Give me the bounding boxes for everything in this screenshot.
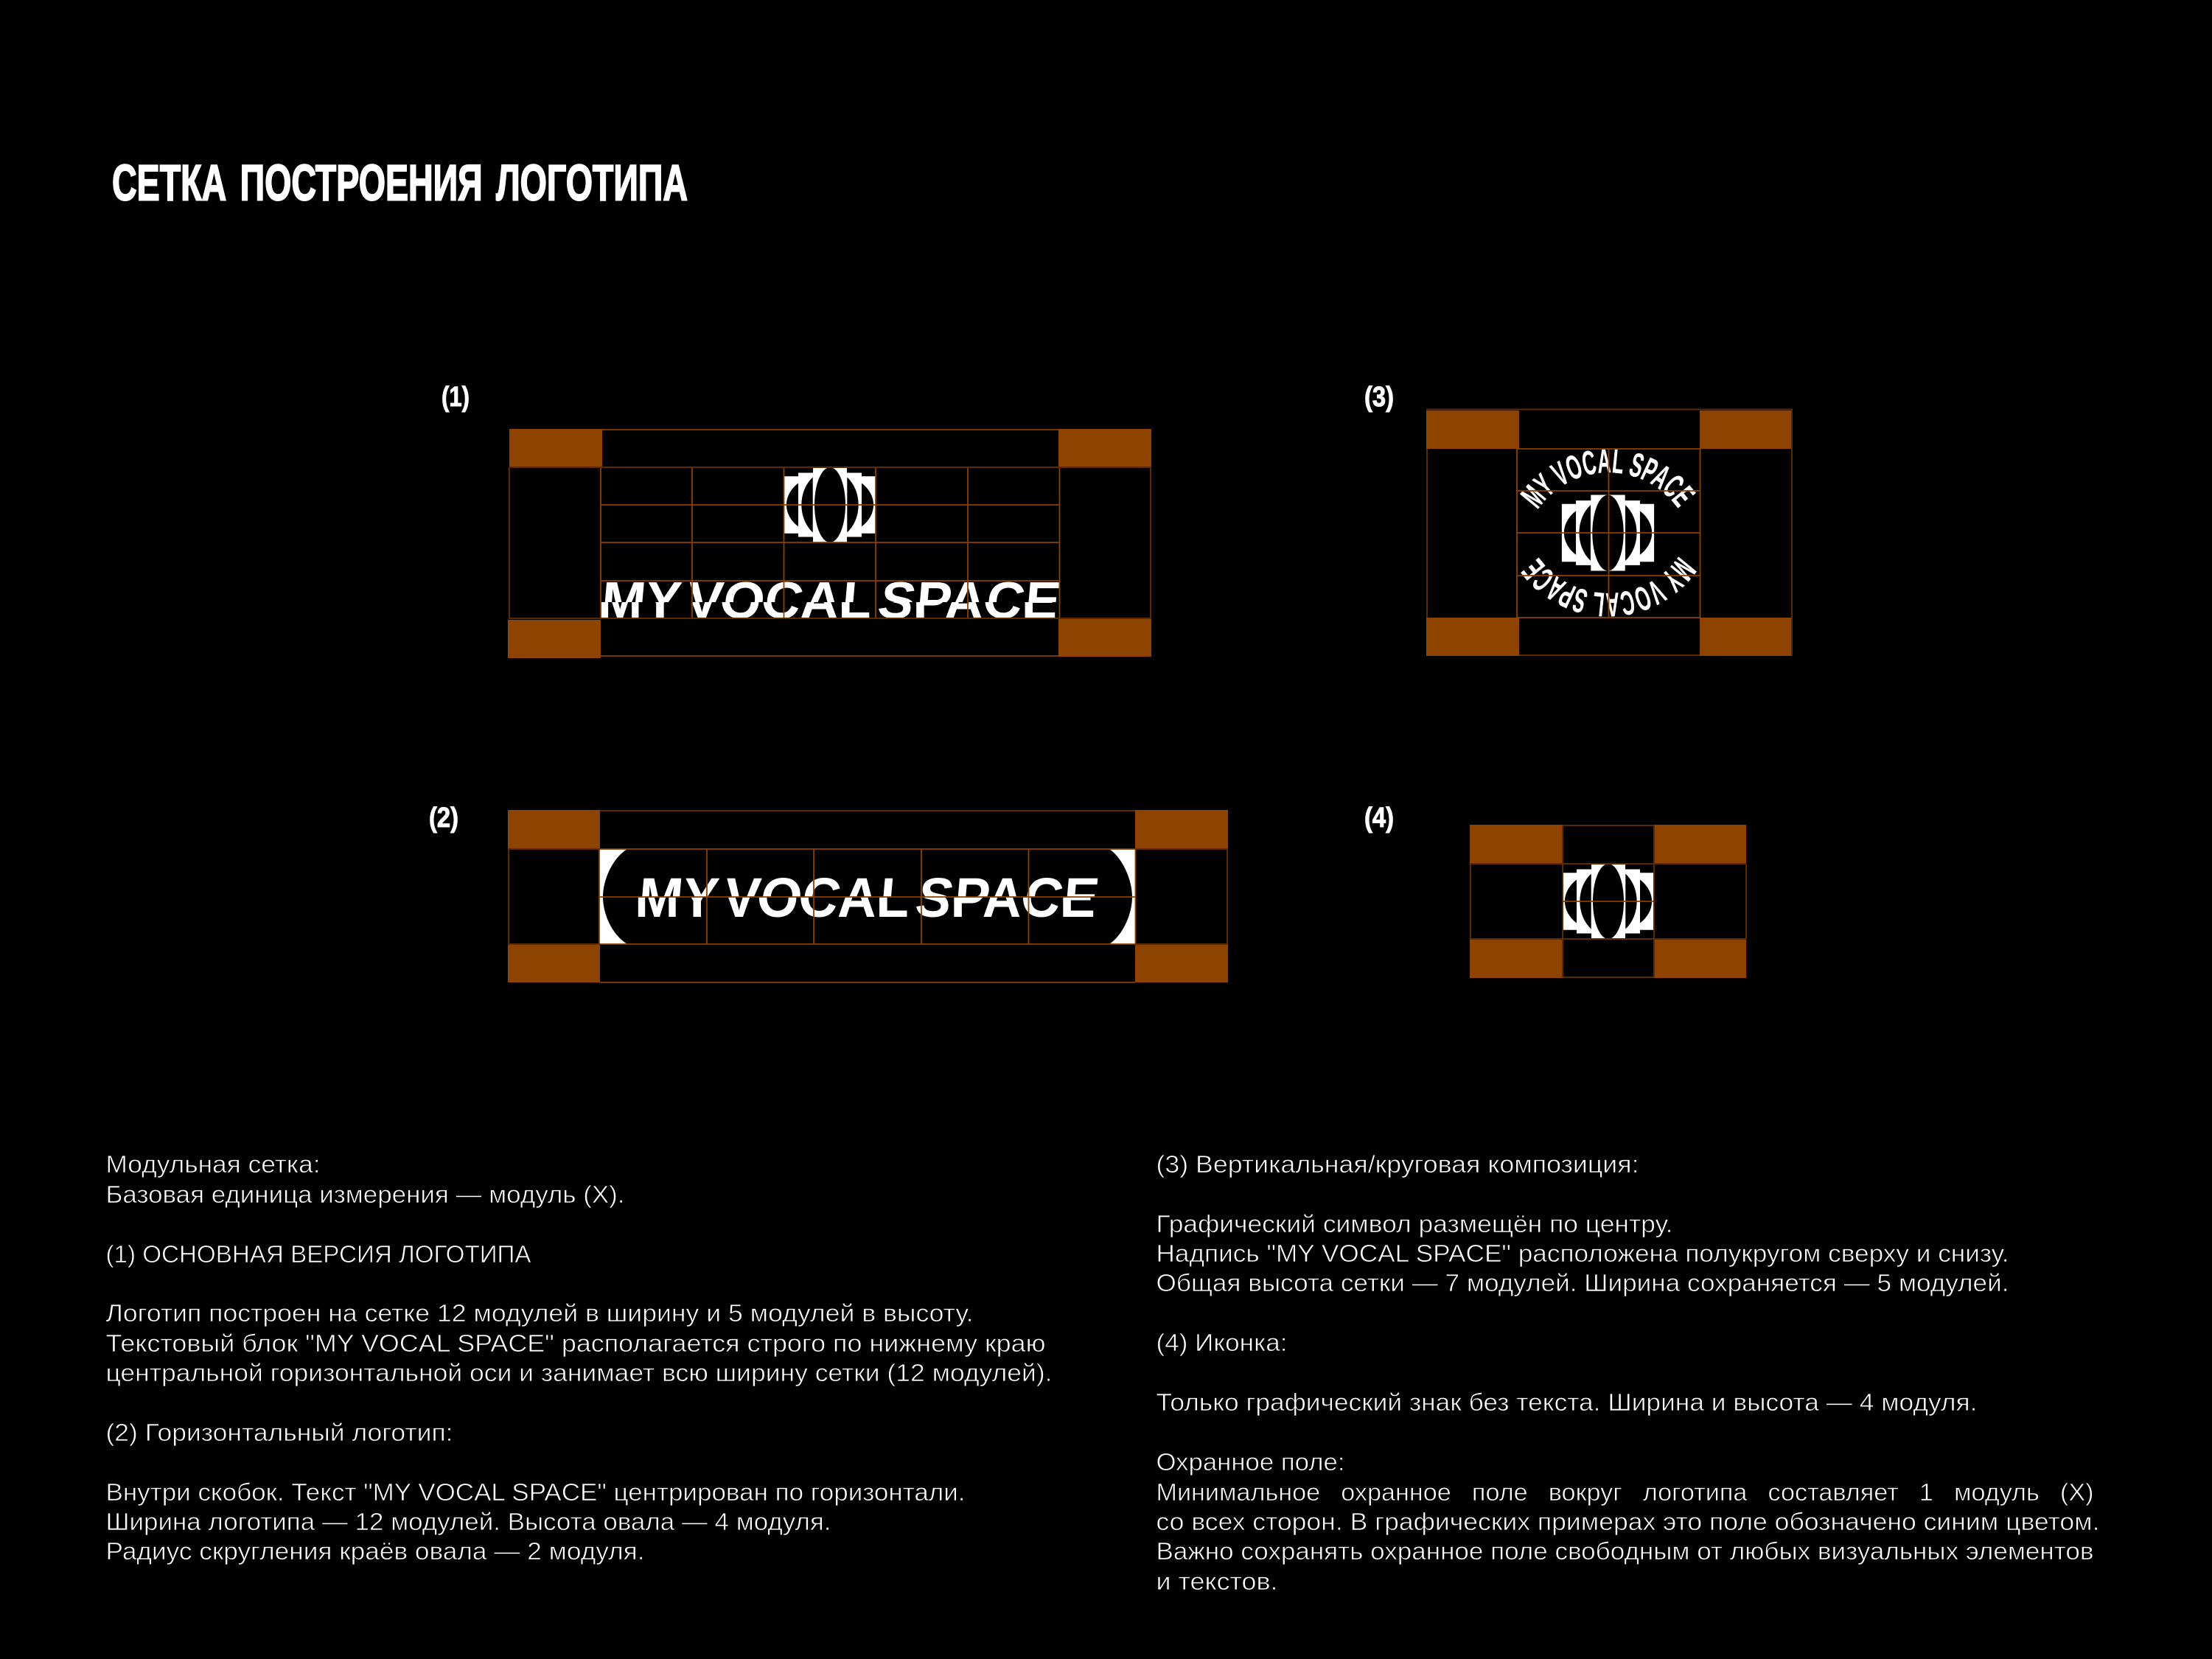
clear-space corner modules — [1470, 825, 1746, 978]
clear-space corner modules — [508, 429, 1151, 658]
panel: horizontal logo grid (2) — [508, 810, 1228, 982]
wordmark: MY VOCAL SPACE — [635, 867, 1095, 929]
text block: left column: Модульная сетка: — [106, 1150, 320, 1178]
text block: right column: Минимальное охранное поле вокруг логотипа составляет 1 модуль (X) — [1156, 1478, 2093, 1506]
logo symbol — [1562, 495, 1654, 571]
text block: right column: Важно сохранять охранное поле свободным от любых визуальных элементов — [1156, 1537, 2093, 1565]
label: (4): (4) — [1364, 803, 1394, 834]
text block: left column: Текстовый блок "MY VOCAL SPACE" располагается строго по нижнему краю — [106, 1330, 1045, 1357]
curved wordmark, top and bottom: MY VOCAL SPACE — [1520, 450, 1696, 509]
wordmark — [638, 878, 1098, 917]
panel: circular logo grid (3) — [1426, 408, 1793, 656]
text block: left column: Логотип построен на сетке 12 модулей в ширину и 5 модулей в высоту. — [106, 1299, 973, 1327]
panel: icon grid (4) — [1470, 825, 1746, 978]
panel: main logo grid (1) — [508, 429, 1151, 658]
text block: left column: Радиус скругления краёв овала — 2 модуля. — [106, 1537, 644, 1565]
label: (2): (2) — [429, 803, 458, 834]
text block: left column: Ширина логотипа — 12 модулей. Высота овала — 4 модуля. — [106, 1508, 831, 1535]
wordmark: MY VOCAL SPACE — [599, 572, 1063, 630]
text block: right column: и текстов. — [1156, 1568, 1278, 1595]
wordmark — [601, 582, 1059, 618]
clear-space corner modules — [1426, 411, 1793, 656]
text block: left column — [106, 1150, 1053, 1565]
grid lines — [1426, 409, 1793, 656]
wordmark: MY VOCAL SPACE — [598, 572, 1057, 630]
text block: left column: центральной горизонтальной оси и занимает всю ширину сетки (12 модулей). — [106, 1359, 1053, 1386]
title: СЕТКА ПОСТРОЕНИЯ ЛОГОТИПА — [112, 155, 688, 211]
grid lines — [508, 811, 1228, 982]
grid lines — [509, 430, 1151, 656]
text block: left column: Внутри скобок. Текст "MY VOCAL SPACE" центрирован по горизонтали. — [106, 1478, 966, 1506]
oval bracket — [599, 849, 1135, 944]
logo symbol — [1563, 864, 1654, 939]
text block: right column: со всех сторон. В графических примерах это поле обозначено синим цветом. — [1156, 1508, 2099, 1535]
curved wordmark, top and bottom — [1520, 450, 1697, 617]
curved wordmark, top and bottom: MY VOCAL SPACE — [1521, 556, 1697, 617]
text block: right column: Охранное поле: — [1156, 1448, 1344, 1475]
logo symbol — [784, 467, 876, 542]
text block: right column: Только графический знак без текста. Ширина и высота — 4 модуля. — [1156, 1389, 1977, 1416]
text block: left column: (2) Горизонтальный логотип: — [106, 1419, 453, 1446]
label: (1): (1) — [442, 382, 470, 413]
text block: right column — [1156, 1150, 2099, 1595]
text block: left column: Базовая единица измерения — модуль (X). — [106, 1181, 624, 1208]
text block: right column: (3) Вертикальная/круговая композиция: — [1156, 1150, 1639, 1178]
label: (3): (3) — [1364, 382, 1394, 413]
grid lines — [1470, 825, 1746, 977]
text block: right column: (4) Иконка: — [1156, 1329, 1287, 1356]
text block: right column: Общая высота сетки — 7 модулей. Ширина сохраняется — 5 модулей. — [1156, 1269, 2009, 1296]
clear-space corner modules — [508, 810, 1228, 982]
text block: right column: Надпись "MY VOCAL SPACE" расположена полукругом сверху и снизу. — [1156, 1240, 2009, 1267]
wordmark: MY VOCAL SPACE — [635, 867, 1102, 929]
text block: right column: Графический символ размещён по центру. — [1156, 1210, 1673, 1237]
text block: left column: (1) ОСНОВНАЯ ВЕРСИЯ ЛОГОТИПА — [106, 1240, 531, 1268]
